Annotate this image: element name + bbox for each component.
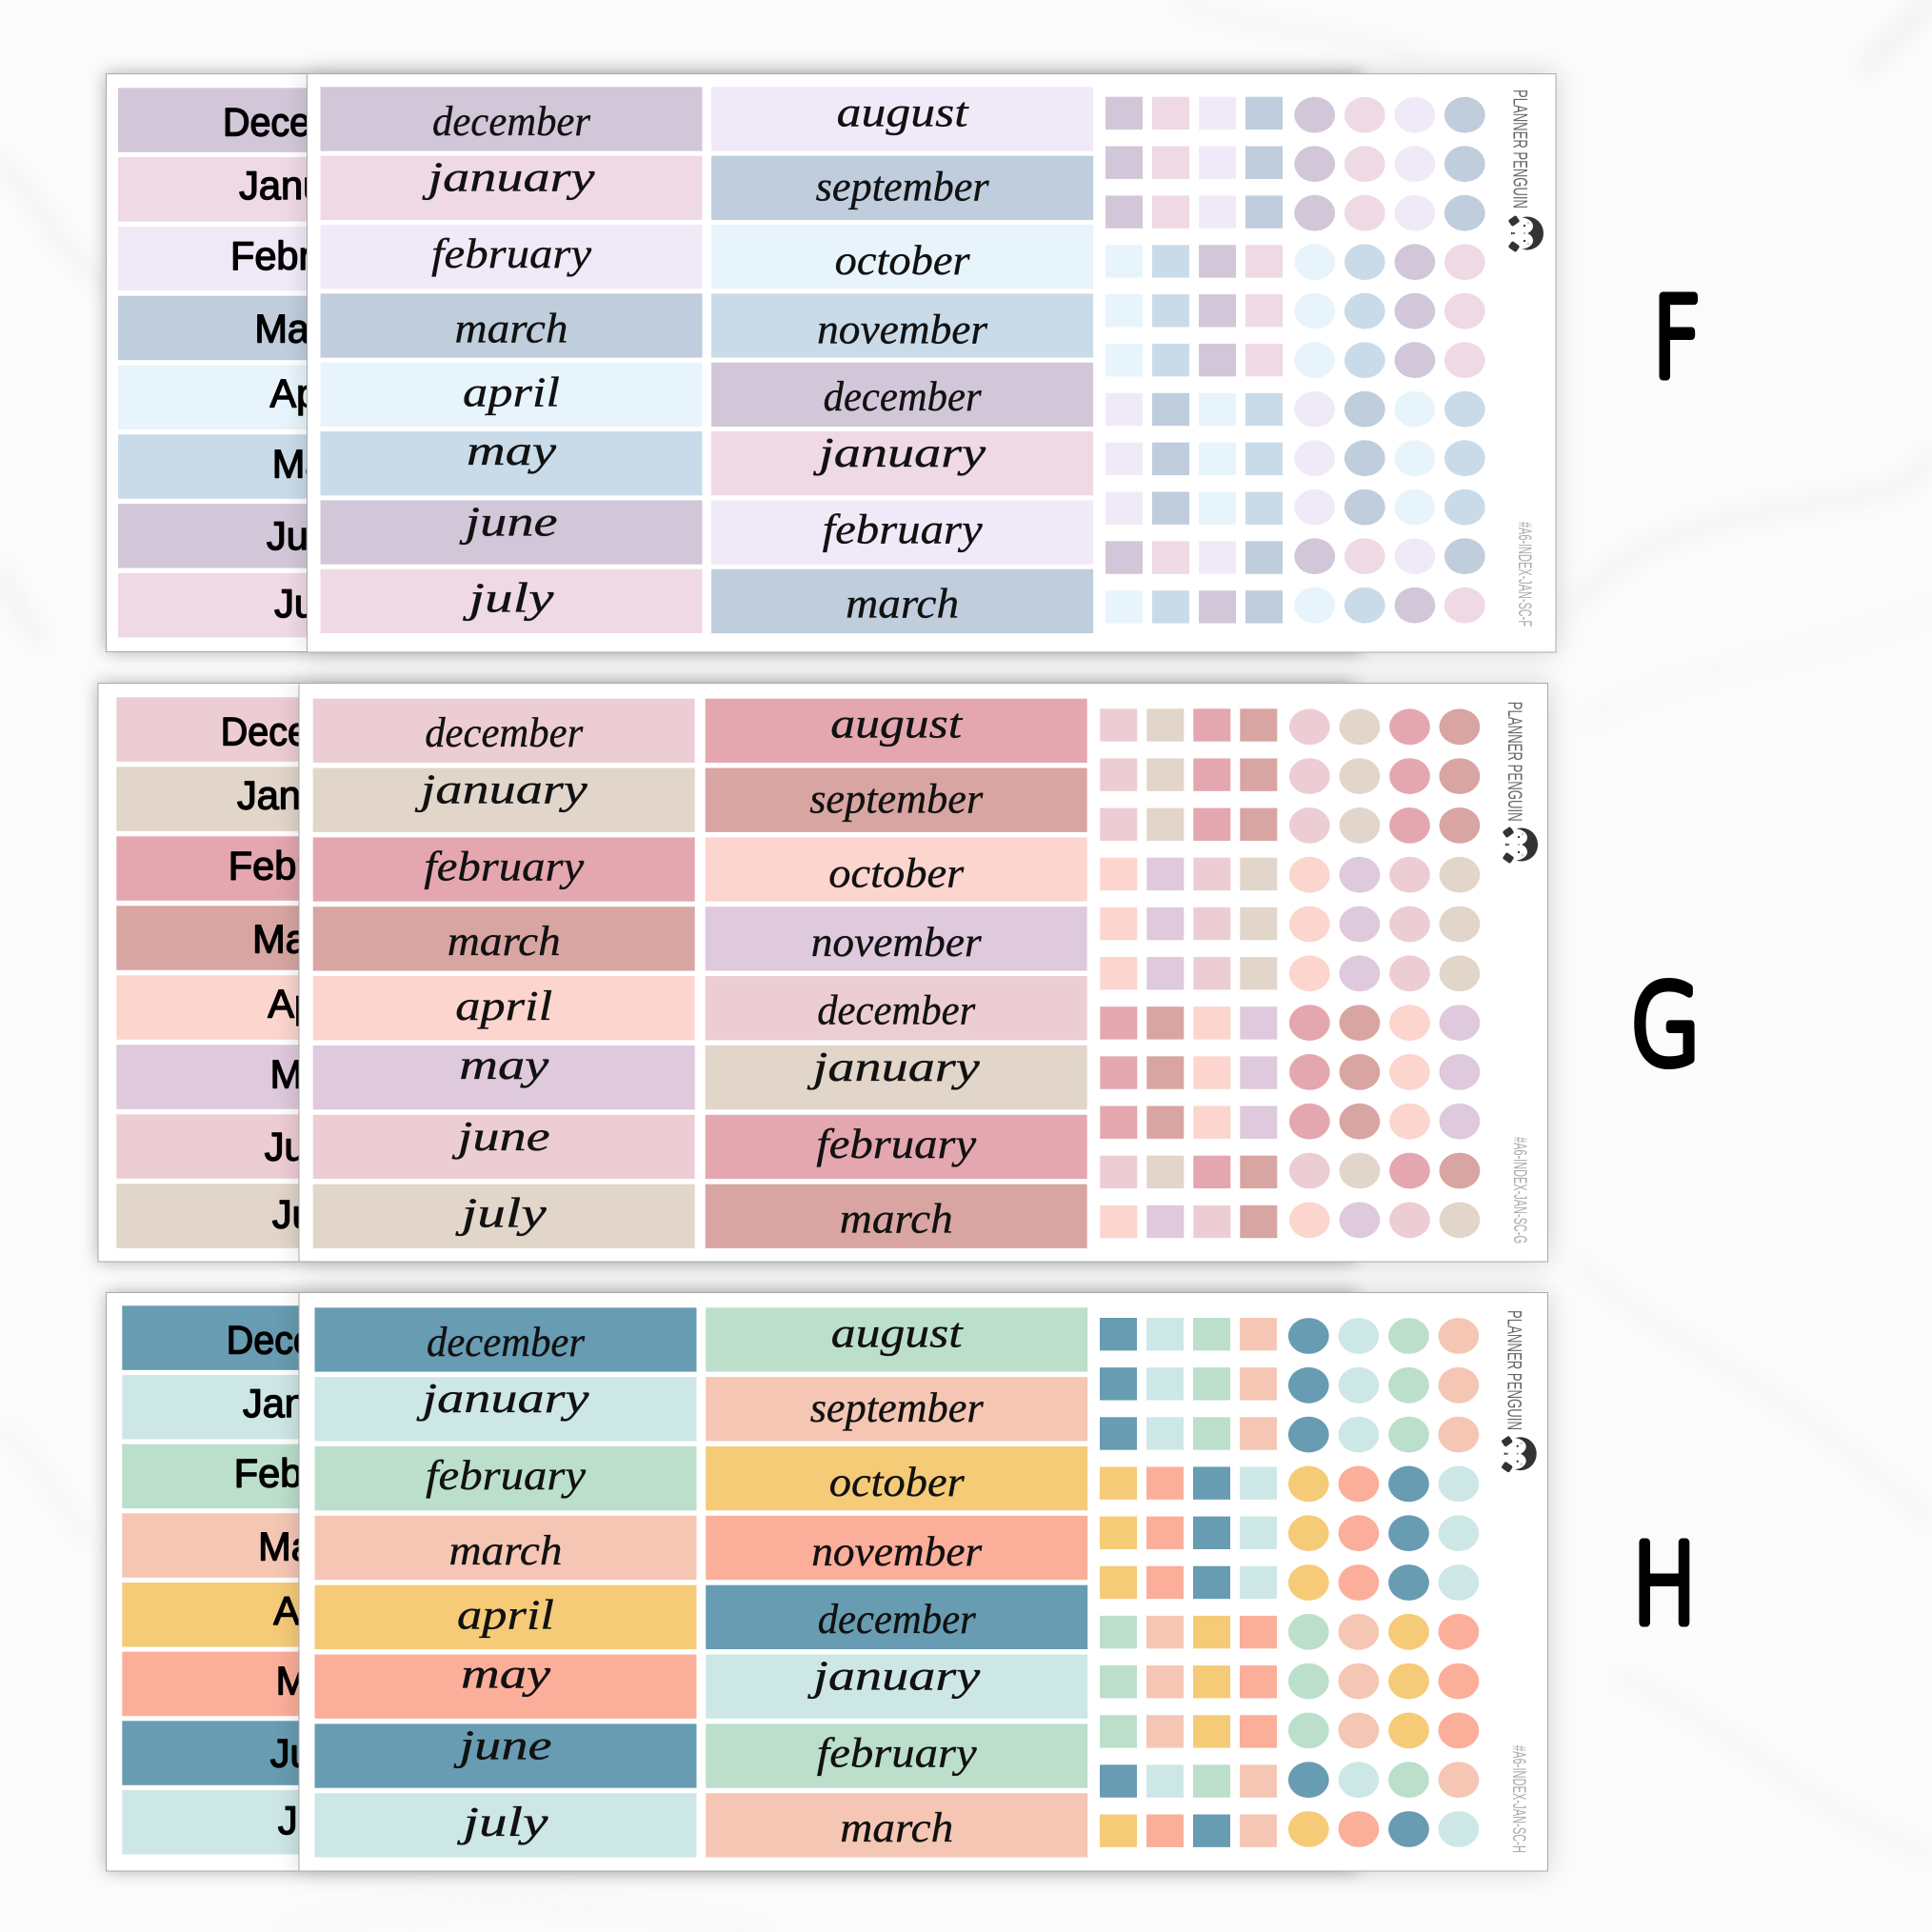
script month labels column 1: april: [463, 369, 560, 416]
script month labels column 1: may: [467, 428, 557, 474]
dot stickers: [1289, 708, 1480, 1238]
back sheet F month labels: May: [272, 441, 347, 486]
script month labels column 1: may: [459, 1042, 549, 1088]
dot stickers: [1294, 97, 1485, 624]
script month labels column 2: march: [840, 1196, 953, 1243]
square stickers: [1100, 1318, 1277, 1847]
product code: #A6-INDEX-JAN-SC-H: [1508, 1745, 1529, 1853]
script month labels column 2: january: [807, 1044, 980, 1090]
square stickers: [1100, 708, 1277, 1238]
back sheet G month labels: January: [237, 772, 378, 817]
script month labels column 1: december: [425, 709, 584, 756]
script month labels column 2: december: [824, 373, 982, 420]
script month labels column 1: february: [431, 230, 592, 277]
script month labels column 1: [320, 87, 703, 633]
script month labels column 1: july: [455, 1190, 547, 1237]
script month labels column 1: [313, 699, 695, 1248]
back sheet G month labels: December: [221, 708, 394, 753]
back sheet H month labels: January: [243, 1381, 384, 1425]
script month labels column 1: april: [455, 983, 552, 1029]
back sheet F month labels: December: [223, 99, 396, 144]
script month labels column 2: [706, 699, 1087, 1248]
back sheet H month labels: May: [276, 1659, 350, 1703]
script month labels column 1: april: [457, 1592, 554, 1639]
script month labels column 1: july: [457, 1799, 548, 1845]
panel: back sheet G: [98, 684, 574, 1262]
back sheet G month labels: [116, 697, 498, 1248]
script month labels column 2: [706, 1307, 1087, 1858]
back sheet H month labels: April: [273, 1588, 352, 1633]
dot stickers: [1288, 1318, 1479, 1847]
script month labels column 2: january: [807, 1653, 981, 1700]
script month labels column 2: august: [830, 701, 964, 747]
back sheet G month labels: April: [268, 981, 347, 1026]
script month labels column 2: february: [823, 506, 983, 552]
square stickers: [1105, 97, 1283, 624]
icon: penguin: [1508, 215, 1544, 252]
script month labels column 2: march: [840, 1804, 953, 1851]
script month labels column 1: july: [463, 575, 554, 622]
script month labels column 1: january: [414, 767, 588, 813]
script month labels column 2: september: [810, 1384, 985, 1431]
script month labels column 2: october: [835, 237, 971, 284]
set letter F: F: [1652, 275, 1702, 403]
back sheet G month labels: March: [252, 916, 362, 961]
back sheet F month labels: June: [267, 513, 352, 558]
icon: penguin: [1503, 827, 1538, 864]
script month labels column 1: february: [426, 1452, 587, 1499]
script month labels column 2: december: [818, 1596, 977, 1643]
sticker set F: [106, 73, 1556, 652]
script month labels column 1: march: [448, 1527, 563, 1574]
script month labels column 1: june: [451, 1113, 550, 1160]
script month labels column 1: december: [432, 98, 591, 145]
product code: #A6-INDEX-JAN-SC-F: [1514, 522, 1535, 627]
script month labels column 2: november: [811, 1528, 983, 1575]
brand name: PLANNER PENGUIN: [1504, 702, 1525, 822]
panel: front sheet G: [299, 684, 1548, 1262]
back sheet G month labels: July: [272, 1191, 343, 1236]
script month labels column 2: november: [811, 919, 983, 966]
script month labels column 1: march: [454, 305, 568, 351]
icon: penguin: [1501, 1436, 1537, 1473]
script month labels column 2: march: [846, 581, 959, 627]
back sheet F month labels: [118, 88, 500, 637]
back sheet H month labels: [122, 1305, 504, 1855]
script month labels column 1: december: [427, 1319, 586, 1365]
sticker set G: [98, 683, 1548, 1262]
panel: back sheet F: [107, 74, 583, 651]
back sheet H month labels: July: [278, 1798, 349, 1842]
script month labels column 1: june: [453, 1722, 552, 1768]
script month labels column 1: january: [422, 154, 595, 201]
set letter H: H: [1632, 1522, 1697, 1649]
back sheet F month labels: January: [239, 163, 380, 208]
script month labels column 1: june: [459, 498, 558, 545]
sticker set H: [107, 1292, 1548, 1871]
script month labels column 1: [314, 1307, 697, 1858]
back sheet F month labels: March: [254, 307, 365, 351]
script month labels column 2: september: [816, 164, 989, 210]
set letter G: G: [1630, 963, 1701, 1090]
back sheet H month labels: December: [227, 1317, 400, 1362]
script month labels column 2: august: [831, 1309, 965, 1356]
back sheet H month labels: June: [270, 1730, 356, 1775]
panel: front sheet H: [299, 1293, 1548, 1871]
script month labels column 2: august: [837, 89, 970, 135]
script month labels column 1: may: [461, 1651, 551, 1698]
back sheet G month labels: February: [229, 843, 387, 887]
script month labels column 1: march: [448, 918, 561, 965]
brand name: PLANNER PENGUIN: [1509, 90, 1531, 209]
back sheet F month labels: July: [274, 581, 345, 626]
back sheet H month labels: March: [258, 1524, 368, 1568]
script month labels column 2: february: [816, 1121, 977, 1167]
script month labels column 1: february: [424, 843, 585, 889]
panel: back sheet H: [107, 1293, 583, 1871]
product code: #A6-INDEX-JAN-SC-G: [1509, 1137, 1530, 1244]
script month labels column 2: october: [828, 849, 965, 896]
brand name: PLANNER PENGUIN: [1503, 1310, 1524, 1430]
script month labels column 2: february: [817, 1729, 977, 1776]
script month labels column 2: january: [813, 429, 986, 476]
back sheet F month labels: April: [269, 371, 349, 416]
script month labels column 2: [711, 87, 1093, 633]
script month labels column 2: november: [817, 306, 988, 352]
script month labels column 2: december: [817, 987, 976, 1034]
panel: front sheet F: [307, 74, 1556, 652]
back sheet G month labels: June: [265, 1124, 350, 1168]
back sheet F month labels: February: [230, 233, 388, 278]
back sheet H month labels: February: [234, 1451, 392, 1496]
back sheet G month labels: May: [270, 1051, 345, 1096]
script month labels column 2: october: [829, 1459, 966, 1505]
script month labels column 2: september: [809, 776, 984, 823]
script month labels column 1: january: [416, 1375, 589, 1422]
